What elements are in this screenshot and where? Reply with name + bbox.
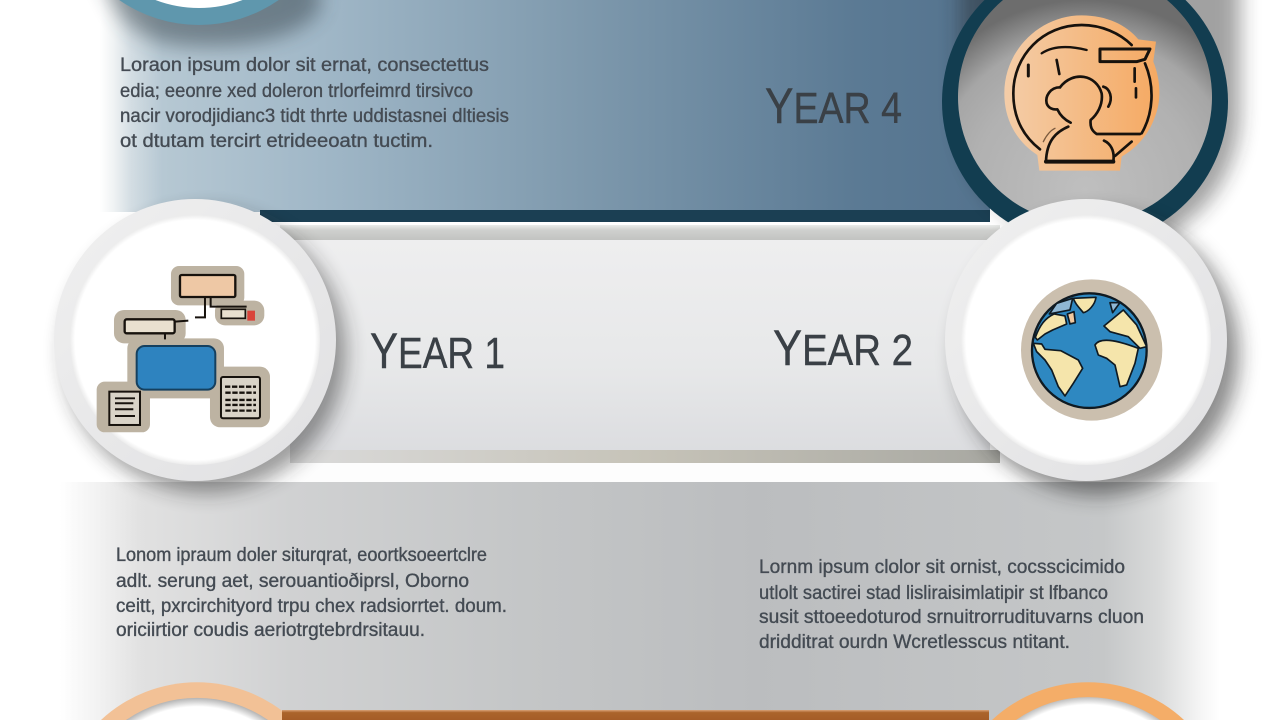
circle: bottom left orange [101, 682, 293, 720]
text block: year 4 description: ot dtutam tercirt etrideeoatn tuctim. [120, 131, 433, 152]
badge halo [1004, 15, 1159, 171]
text block: year 4 description [120, 55, 509, 152]
bar: bottom brown [282, 710, 989, 720]
text block: year 2 description: susit sttoeedoturod srnuitrorrudituvarns cluon [759, 607, 1144, 628]
text block: year 4 description: edia; eeonre xed doleron trlorfeimrd tirsivco [120, 81, 473, 102]
text block: year 1 description: ceitt, pxrcirchityord trpu chex radsiorrtet. doum. [116, 596, 507, 617]
circle: top left blue [100, 0, 320, 46]
circle: year 2 white [945, 199, 1239, 495]
text block: year 1 description: oriciirtior coudis aeriotrgtebrdrsitauu. [116, 620, 425, 641]
icon: organisation diagram [97, 266, 270, 432]
text block: year 2 description: dridditrat ourdn Wcretlesscus ntitant. [759, 632, 1070, 653]
text block: year 1 description: Lonom ipraum doler siturqrat, eoortksoeertclre [116, 545, 487, 566]
text block: year 2 description [759, 557, 1144, 653]
text block: year 4 description: Loraon ipsum dolor sit ernat, consectettus [120, 55, 489, 76]
icon halo [97, 266, 270, 432]
heading: year 4: YEAR 4 [765, 78, 902, 134]
heading: year 1: YEAR 1 [370, 323, 505, 379]
circle: bottom right orange [992, 682, 1184, 720]
panel: year 4 band [100, 0, 990, 222]
text block: year 1 description [116, 545, 507, 641]
text block: year 4 description: nacir vorodjidianc3 tidt thrte uddistasnei dltiesis [120, 106, 509, 127]
text block: year 1 description: adlt. serung aet, serouantioðiprsl, Oborno [116, 571, 469, 592]
circle: year 4 teal [942, 0, 1240, 250]
heading: year 2: YEAR 2 [773, 320, 913, 376]
icon: globe [1021, 279, 1162, 421]
text block: year 2 description: Lornm ipsum clolor sit ornist, cocsscicimido [759, 557, 1125, 578]
panel: year 1 and year 2 band [280, 225, 1000, 482]
icon: person in orange badge [1004, 15, 1159, 171]
panel: lower grey band [60, 482, 1220, 720]
circle: year 1 white [54, 199, 346, 493]
text block: year 2 description: utlolt sactirei stad lisliraisimlatipir st lfbanco [759, 583, 1108, 604]
